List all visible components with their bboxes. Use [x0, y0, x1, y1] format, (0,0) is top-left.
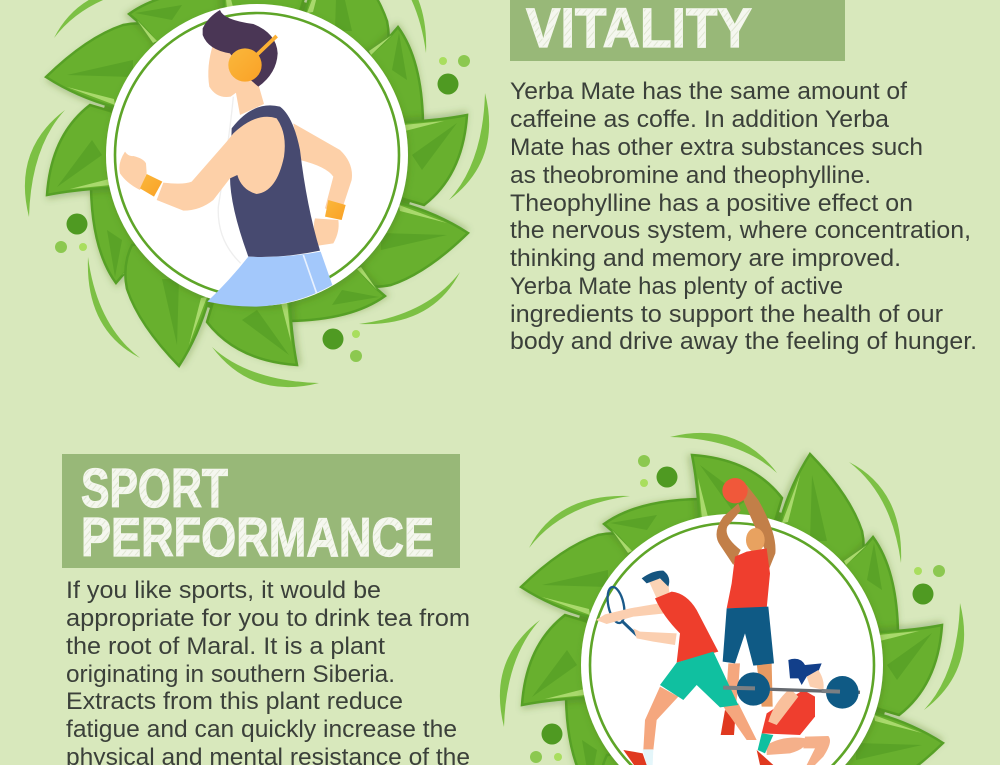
heading bar: sport performance — [62, 454, 460, 568]
weightlifter — [758, 659, 830, 765]
text block: vitality: Yerba Mate has the same amount of — [510, 78, 907, 105]
text block: vitality: Theophylline has a positive effect on — [510, 190, 913, 217]
text block: vitality: ingredients to support the health of our — [510, 301, 943, 328]
text block: vitality: caffeine as coffe. In addition Yerba — [510, 106, 890, 133]
heading bar: sport performance: SPORT — [81, 457, 228, 519]
leaf wreath: sport — [500, 433, 964, 765]
text block: sport performance: Extracts from this plant reduce — [66, 688, 403, 715]
text block: vitality: thinking and memory are improved. — [510, 245, 901, 272]
text block: sport performance: originating in southern Siberia. — [66, 661, 395, 688]
athletes figures — [596, 478, 860, 765]
runner figure — [119, 10, 352, 307]
panel: sport illustration — [500, 433, 964, 765]
text block: sport performance — [66, 577, 470, 765]
text block: vitality: Yerba Mate has plenty of active — [510, 273, 843, 300]
text block: vitality: Mate has other extra substances such — [510, 134, 923, 161]
text block: sport performance: the root of Maral. It is a plant — [66, 633, 385, 660]
text block: vitality — [510, 78, 977, 355]
text block: sport performance: fatigue and can quickly increase the — [66, 716, 457, 743]
text block: vitality: the nervous system, where concentration, — [510, 217, 971, 244]
white medallion: sport — [581, 514, 883, 765]
leaf wreath: vitality — [25, 0, 489, 387]
basketball player — [717, 478, 776, 735]
white medallion: vitality — [106, 4, 408, 306]
barbell — [723, 672, 860, 709]
panel: vitality illustration — [25, 0, 489, 387]
tennis player — [596, 571, 773, 765]
text block: sport performance: If you like sports, it would be — [66, 577, 381, 604]
text block: sport performance: appropriate for you to drink tea from — [66, 605, 470, 632]
text block: vitality: as theobromine and theophylline. — [510, 162, 871, 189]
text block: vitality: body and drive away the feeling of hunger. — [510, 328, 977, 355]
heading bar: sport performance: PERFORMANCE — [81, 506, 434, 568]
